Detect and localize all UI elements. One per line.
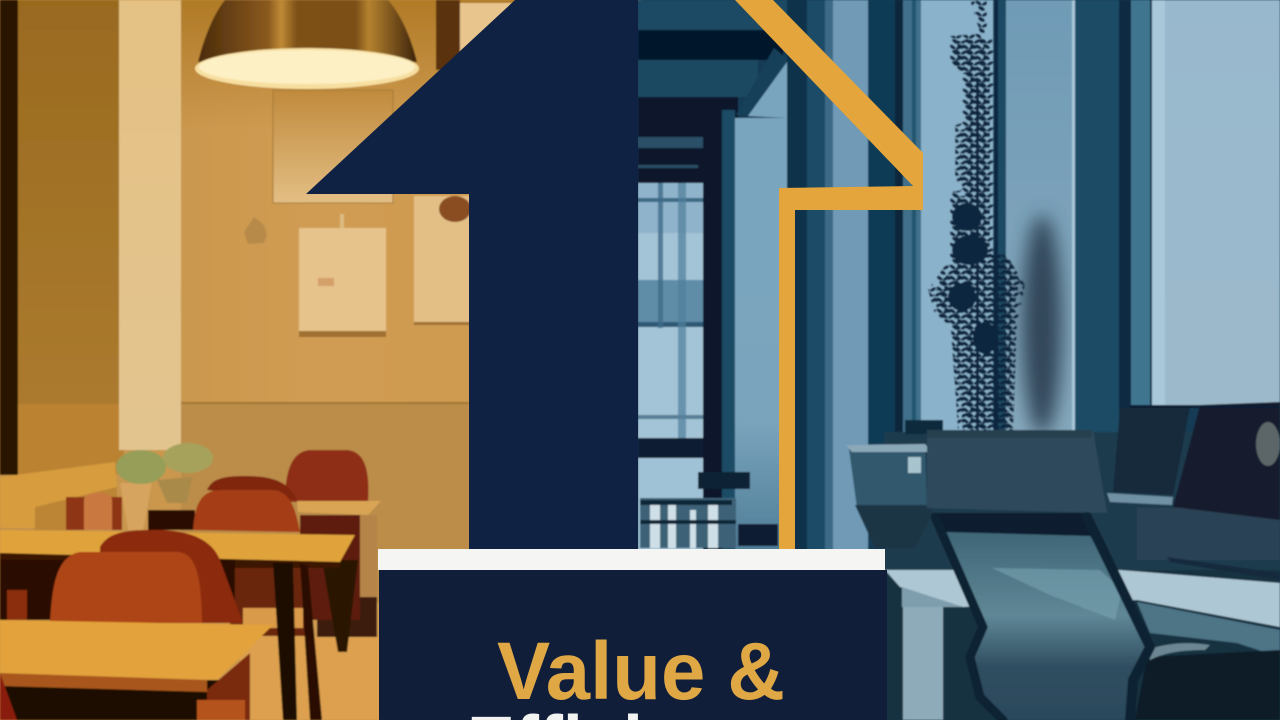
planter and bench: [0, 443, 213, 530]
front chair and table: [0, 552, 273, 720]
photo: cool blue office interior: [636, 0, 1280, 720]
floor: [240, 636, 380, 720]
furniture reflection: [640, 472, 778, 548]
gold house outline: [735, 0, 923, 549]
photo: warm restaurant interior: [0, 0, 641, 720]
office window panes: [638, 183, 735, 550]
desks and floor: [884, 432, 1280, 720]
climbing plant silhouette: [928, 0, 1025, 436]
pendant lamp: [195, 0, 419, 89]
back chairs and tables: [0, 450, 381, 720]
navy upward arrow / number 1 shape: [306, 0, 638, 550]
white shelf bar: [378, 549, 885, 570]
computer monitors: [1107, 402, 1280, 580]
left office chair: [846, 420, 943, 548]
front office chair: [927, 430, 1280, 720]
navy title panel: [379, 570, 887, 720]
wall posters: [244, 90, 471, 337]
title: Value &: [497, 626, 785, 717]
wall shadow: [1022, 215, 1062, 435]
